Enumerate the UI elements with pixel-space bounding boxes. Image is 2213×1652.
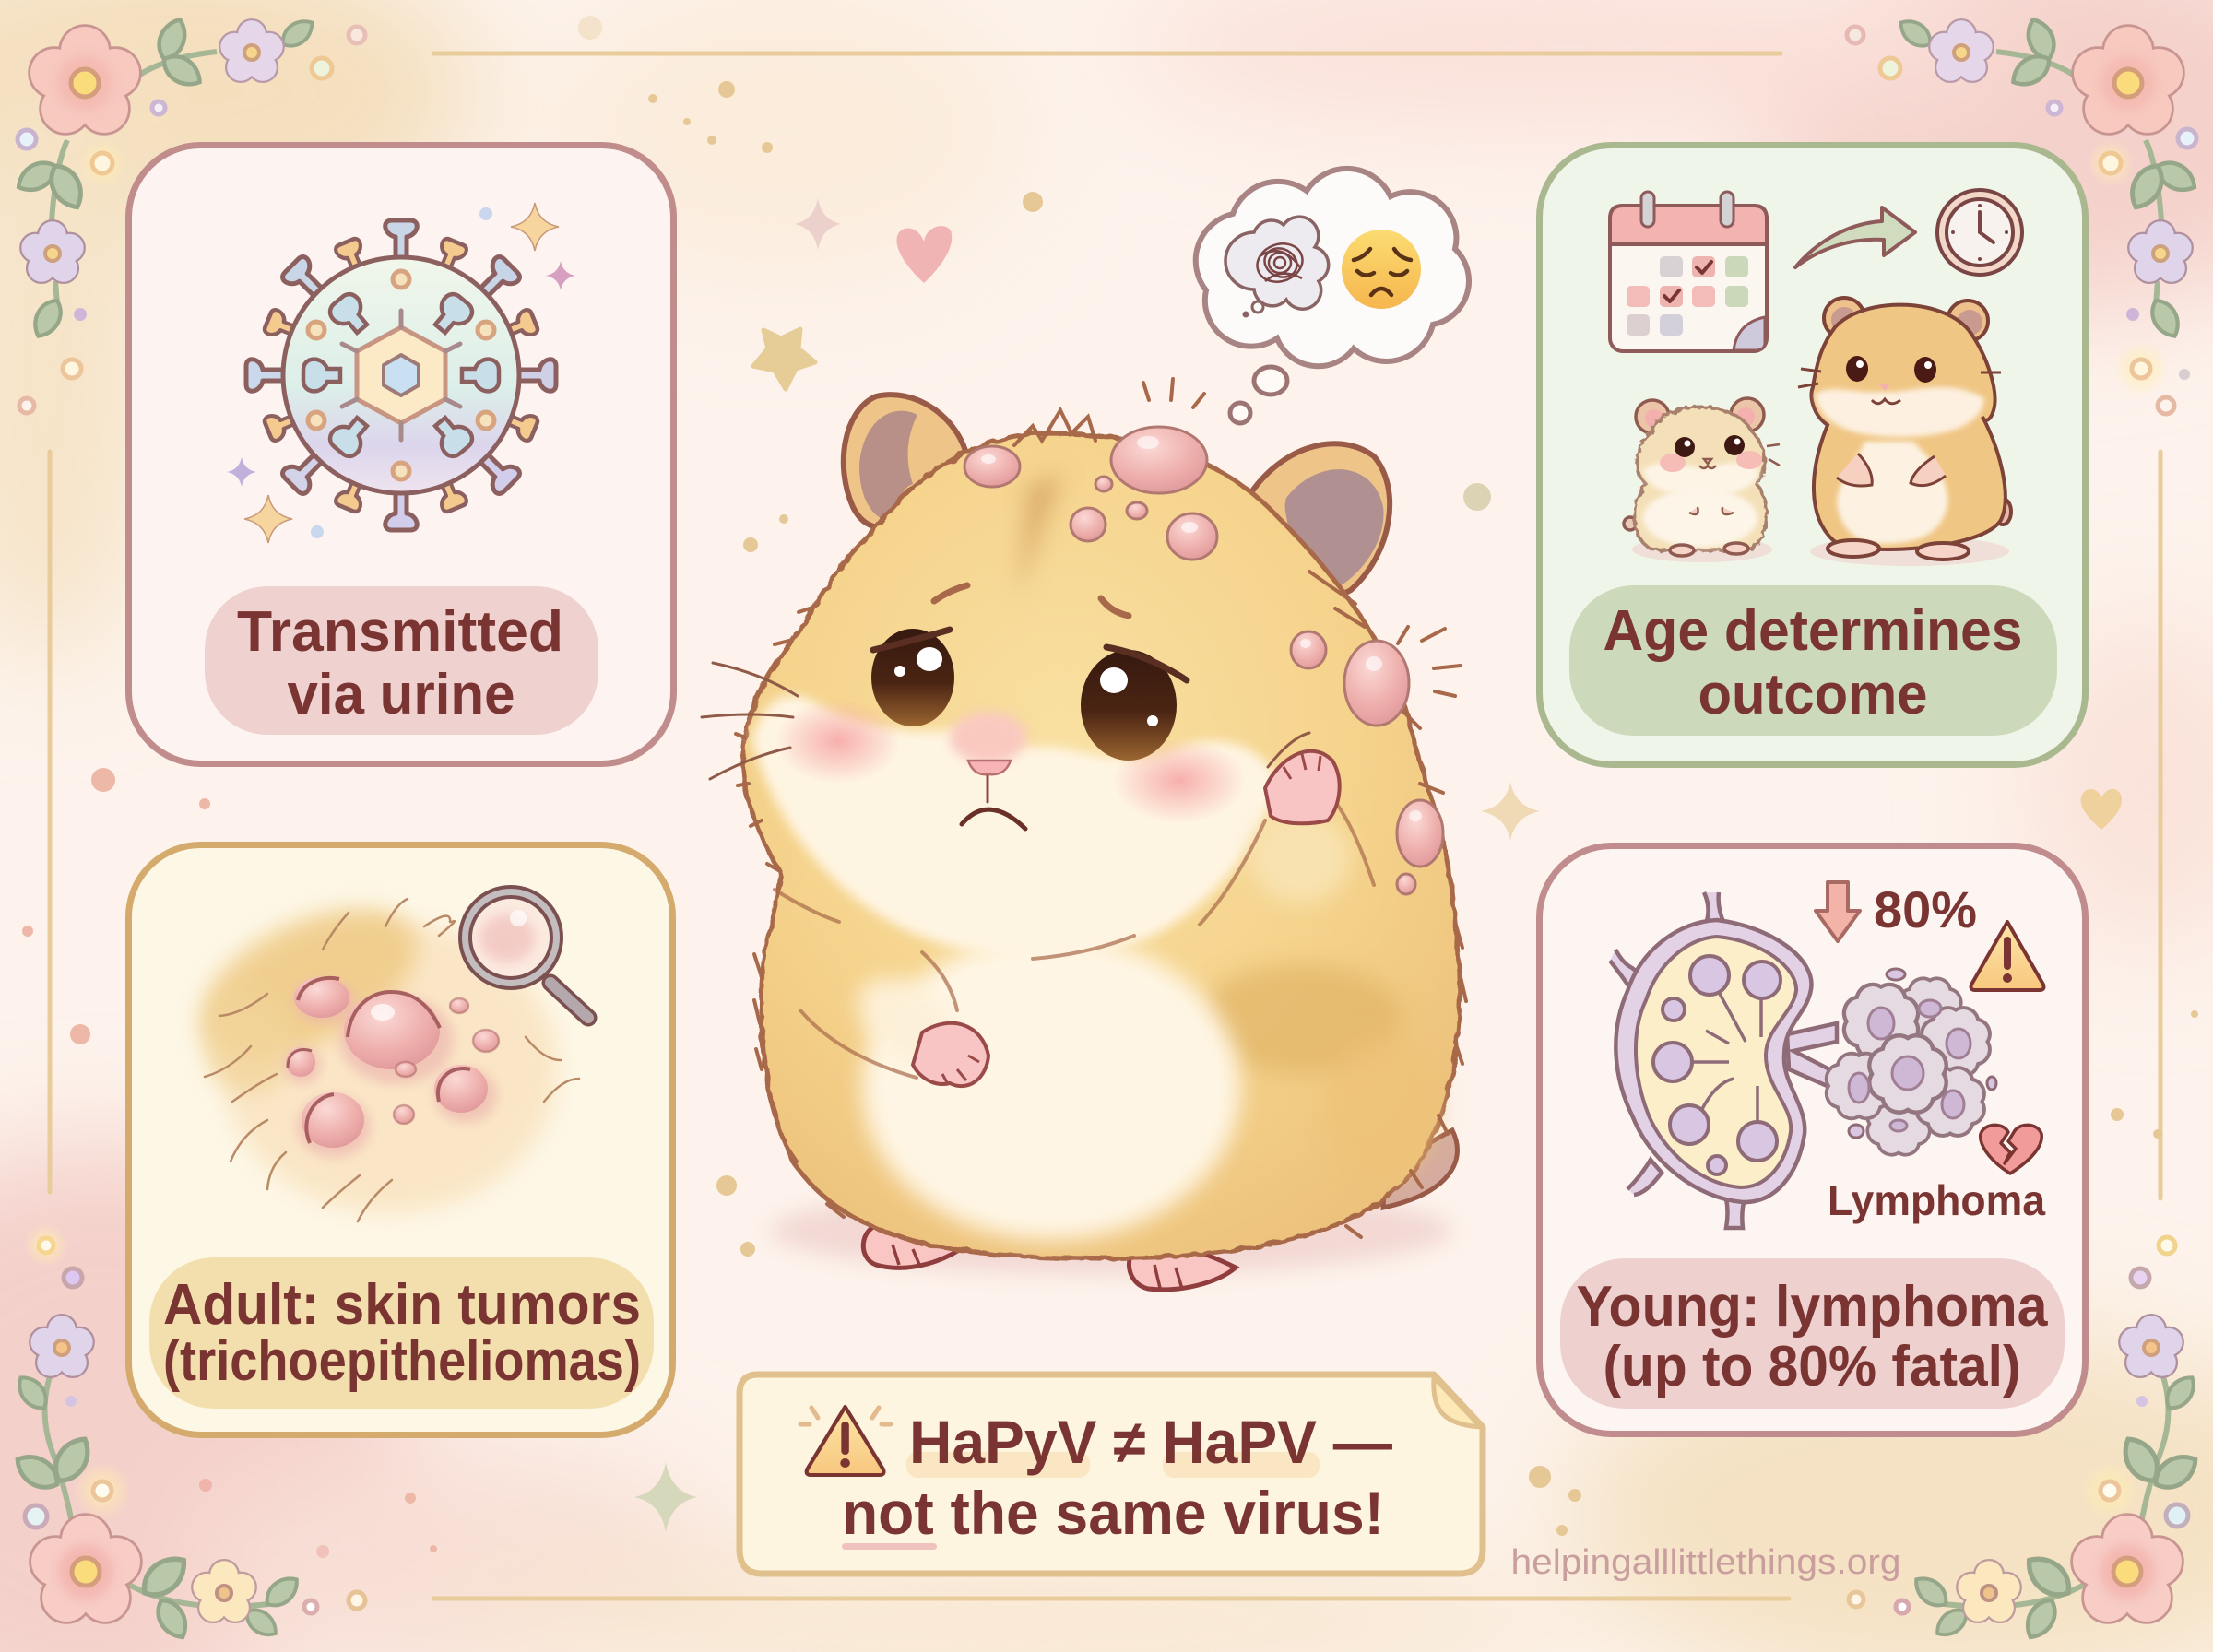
label pill bbox=[1560, 1258, 2065, 1409]
right eye bbox=[1081, 647, 1187, 761]
icon: sad face bbox=[1342, 230, 1421, 309]
website credit: helpingalllittlethings.org bbox=[1510, 1543, 1901, 1582]
icon: clock bbox=[1937, 190, 2022, 275]
arrow bbox=[1795, 207, 1915, 267]
label: lymphoma: Lymphoma bbox=[1828, 1176, 2045, 1224]
young hamster bbox=[1624, 398, 1780, 562]
right paw bbox=[1265, 751, 1340, 823]
skin patch with tumors bbox=[179, 879, 579, 1221]
brows nose and mouth bbox=[934, 585, 1129, 829]
blush bbox=[1113, 738, 1246, 823]
label pill bbox=[205, 586, 598, 735]
panel: adult skin tumors bbox=[129, 844, 673, 1434]
heart bbox=[896, 226, 952, 283]
icon: broken heart bbox=[1981, 1125, 2041, 1174]
callout note bbox=[740, 1375, 1483, 1574]
label pill: Transmitted bbox=[237, 600, 563, 664]
raised arm highlight bbox=[1249, 811, 1351, 903]
ground shadow bbox=[770, 1186, 1452, 1275]
panel: young lymphoma bbox=[1540, 846, 2086, 1434]
pink sparkle bbox=[795, 198, 841, 250]
gold heart right bbox=[2081, 789, 2122, 830]
floral corner bottom right bbox=[1910, 1316, 2202, 1643]
left eye bbox=[871, 629, 954, 726]
left paw bbox=[913, 1023, 988, 1086]
tail bbox=[1383, 1130, 1457, 1208]
icon: warning bbox=[800, 1407, 891, 1475]
icon: calendar bbox=[1610, 192, 1767, 351]
underline bbox=[842, 1543, 937, 1550]
sand sparkle right bbox=[1481, 782, 1540, 841]
label pill: (trichoepitheliomas) bbox=[163, 1329, 641, 1393]
label pill: outcome bbox=[1698, 663, 1927, 726]
panel: age determines outcome bbox=[1540, 146, 2086, 765]
main hamster illustration bbox=[702, 395, 1466, 1290]
label pill bbox=[149, 1257, 654, 1409]
label pill: (up to 80% fatal) bbox=[1603, 1335, 2021, 1398]
left arm highlight bbox=[842, 961, 975, 1086]
icon: lymphoma cell cluster bbox=[1827, 969, 1996, 1155]
whiskers bbox=[702, 663, 1309, 779]
floral corner top right bbox=[1895, 15, 2200, 341]
ears bbox=[844, 395, 1390, 594]
floral corner top left bbox=[13, 15, 318, 341]
icon: lymph node bbox=[1610, 892, 1837, 1228]
floral corner bottom left bbox=[11, 1316, 303, 1643]
icon: virus bbox=[227, 203, 575, 543]
label pill: Adult: skin tumors bbox=[163, 1273, 641, 1337]
belly bbox=[862, 936, 1240, 1240]
body silhouette bbox=[743, 433, 1460, 1258]
worry marks bbox=[1143, 379, 1461, 696]
feet bbox=[863, 1223, 1236, 1290]
highlight marks bbox=[906, 1452, 1320, 1478]
icon: warning bbox=[1971, 922, 2043, 990]
tumors bbox=[964, 427, 1443, 894]
callout text: not the same virus! bbox=[842, 1479, 1384, 1547]
callout text bbox=[842, 1408, 1392, 1547]
blush bbox=[775, 699, 901, 784]
icon: down arrow bbox=[1816, 882, 1860, 941]
sage sparkle bottom bbox=[634, 1462, 697, 1532]
thought bubble bbox=[1196, 169, 1469, 423]
star bbox=[753, 329, 815, 389]
fur strokes bbox=[736, 410, 1466, 1245]
face and chest white bbox=[751, 695, 1277, 958]
icon: magnifying glass bbox=[460, 887, 588, 1018]
label pill: via urine bbox=[288, 663, 515, 726]
fur shading bbox=[1018, 473, 1438, 1180]
adult hamster bbox=[1798, 298, 2011, 566]
callout text: HaPyV ≠ HaPV — bbox=[909, 1408, 1392, 1476]
label pill bbox=[1569, 585, 2057, 736]
panel: transmitted via urine bbox=[129, 146, 673, 763]
label pill: Young: lymphoma bbox=[1577, 1275, 2048, 1339]
icon: tangled thoughts bbox=[1225, 217, 1329, 317]
stat: 80%: 80% bbox=[1874, 880, 1977, 938]
label pill: Age determines bbox=[1603, 599, 2023, 663]
